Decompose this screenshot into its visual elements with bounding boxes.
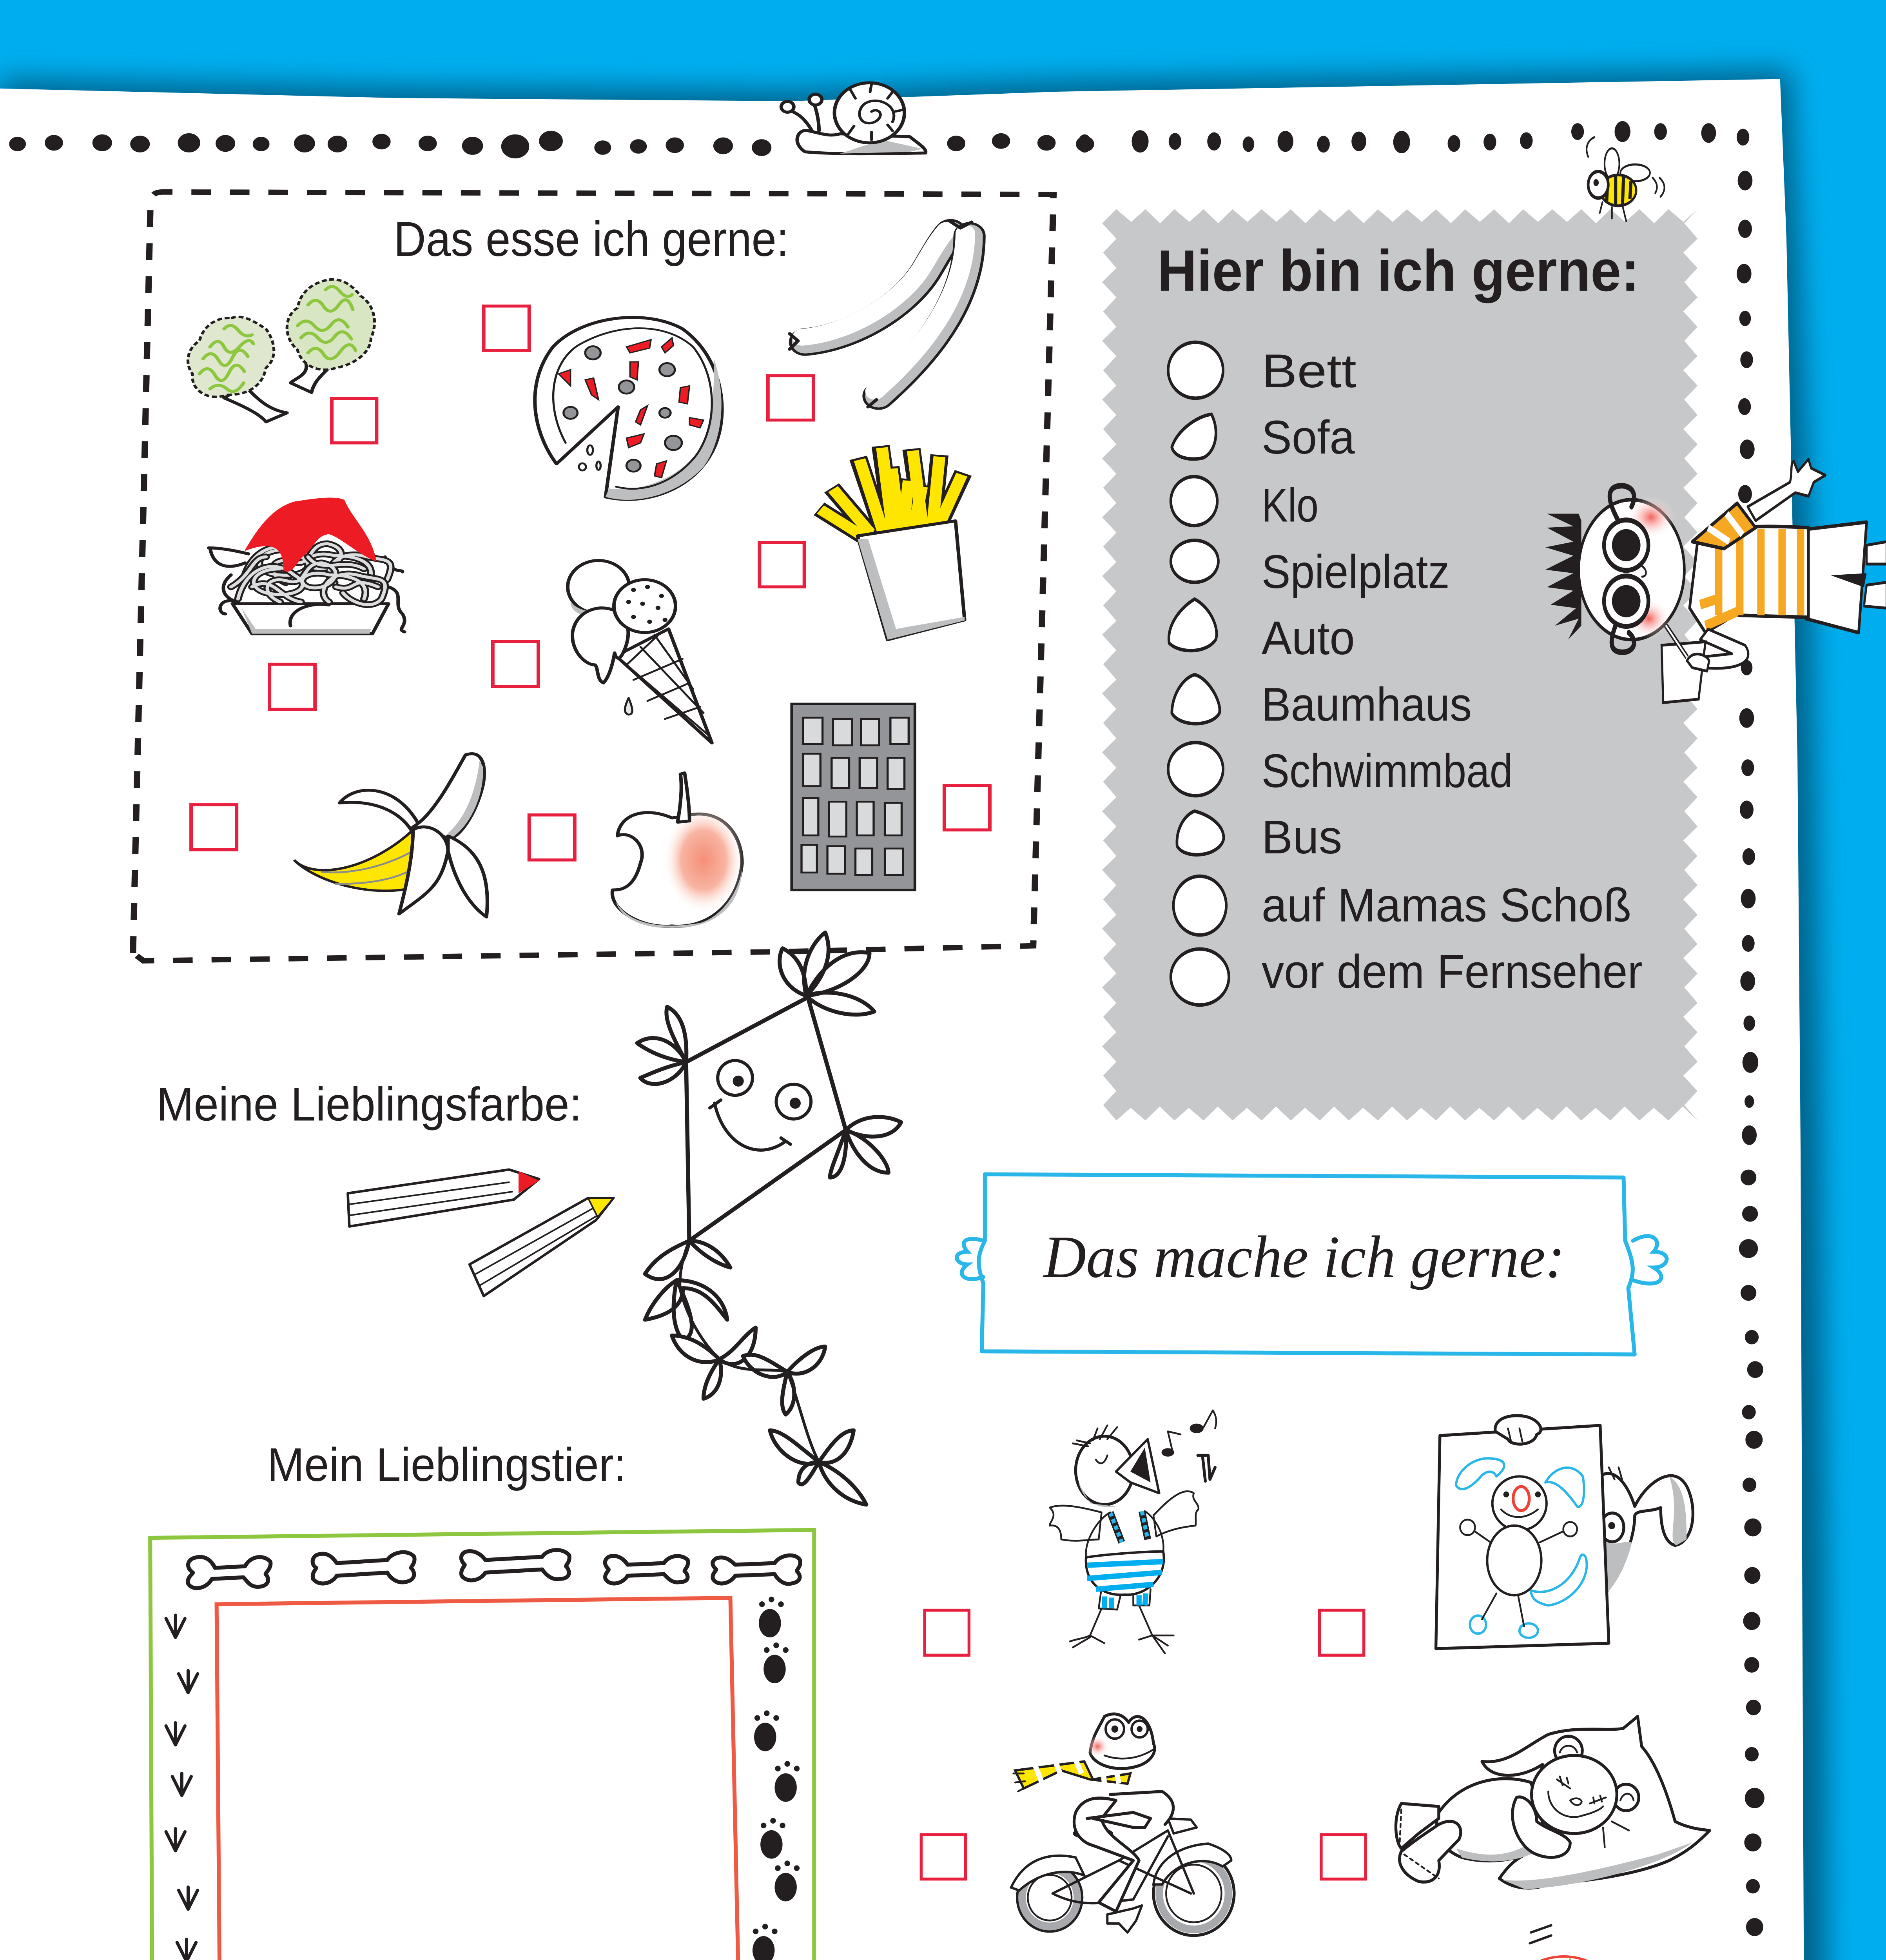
icon: ball [1500, 1925, 1658, 1960]
heading: food: Das esse ich gerne: [394, 212, 789, 267]
icon: singing bird [1050, 1410, 1216, 1653]
bird tracks left [164, 1615, 198, 1960]
kite bows [637, 933, 901, 1504]
icon: sausages [790, 221, 972, 407]
icon: chocolate bar [792, 704, 915, 890]
list: places: Spielplatz [1262, 545, 1450, 598]
list: places: Auto [1262, 611, 1355, 664]
food panel group [11, 83, 1093, 961]
icon: boy with glasses [1545, 459, 1886, 702]
banner text: Das mache ich gerne: [1043, 1224, 1565, 1290]
banner: activities heading [957, 1174, 1667, 1354]
list: places [1262, 344, 1643, 998]
list: places: vor dem Fernseher [1262, 945, 1643, 998]
icon: yellow pencil [470, 1198, 613, 1296]
answer circles [1168, 342, 1229, 1005]
top dotted border left [11, 132, 1093, 157]
activities group [911, 1330, 1764, 1960]
paw prints right [753, 1597, 800, 1960]
icon: red pencil [348, 1170, 539, 1227]
food checkboxes [191, 306, 990, 860]
bottom dotted border [24, 1170, 1758, 1960]
icon: kite [637, 933, 901, 1504]
icon: frog on bicycle [1011, 1714, 1234, 1935]
bones top and bottom [183, 1550, 800, 1960]
icon: pizza [535, 318, 722, 500]
text: favourite colour: Meine Lieblingsfarbe: [156, 1078, 582, 1131]
list: places: Schwimmbad [1262, 744, 1513, 797]
grey zigzag panel [1102, 209, 1697, 1120]
icon: banana [294, 754, 487, 917]
activity checkboxes [911, 1610, 1366, 1960]
panel: animal drawing frame [150, 1530, 814, 1960]
list: places: Sofa [1262, 410, 1355, 464]
list: places: Baumhaus [1262, 678, 1472, 731]
icon: spaghetti with sauce [209, 498, 404, 634]
top and right dotted border [1078, 121, 1758, 1145]
icon: french fries [819, 446, 965, 640]
text: favourite animal: Mein Lieblingstier: [267, 1438, 626, 1491]
icon: child's drawing and bunny [1436, 1416, 1693, 1649]
icon: bee [1587, 137, 1665, 221]
list: places: Bett [1262, 344, 1356, 397]
list: places: Klo [1262, 479, 1318, 532]
icon: snail top [781, 83, 926, 154]
icon: sleeping teddy on pillow [1396, 1717, 1710, 1889]
activity list panel group [1078, 121, 1886, 1145]
icon: ice cream cone [568, 561, 712, 743]
right dotted border lower [1742, 1330, 1764, 1960]
list: places: Bus [1262, 810, 1342, 864]
icon: apple [612, 773, 744, 927]
dashed food frame [133, 192, 1054, 961]
list: places: auf Mamas Schoß [1262, 878, 1632, 932]
heading: places: Hier bin ich gerne: [1157, 238, 1639, 303]
icon: lettuce [188, 279, 375, 422]
